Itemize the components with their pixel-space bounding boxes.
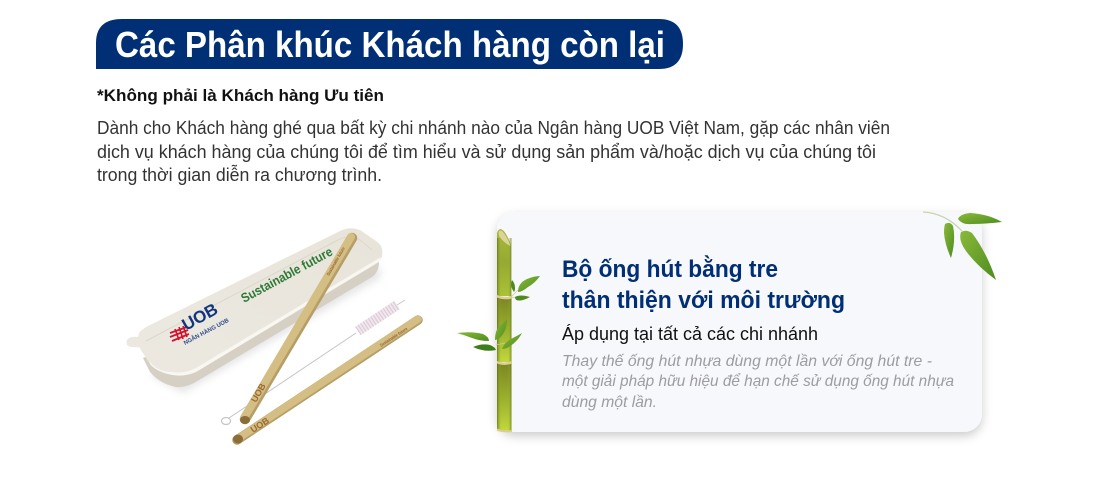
card heading: Bộ ống hút bằng tre: [562, 255, 778, 283]
panel: bamboo straw card: [497, 212, 982, 432]
straw crossing case: [240, 237, 352, 424]
card heading: [562, 255, 845, 314]
loose straw: UOB: [249, 415, 271, 435]
case lid: [126, 228, 382, 376]
title banner: Các Phân khúc Khách hàng còn lại: [115, 24, 665, 65]
logo on case: UOB: [179, 299, 221, 334]
icon: bamboo stalk with leaves: [457, 229, 540, 432]
straw crossing case: Sustainable future: [326, 246, 346, 276]
description paragraph: [97, 118, 890, 185]
case shadow: [150, 265, 380, 393]
icon: bamboo leaves at card corner: [923, 212, 1002, 280]
loose straw: [233, 319, 418, 444]
card description: Thay thế ống hút nhựa dùng một lần với ống hút tre -: [562, 353, 932, 370]
slogan on case: Sustainable future: [238, 244, 335, 306]
description paragraph: Dành cho Khách hàng ghé qua bất kỳ chi nhánh nào của Ngân hàng UOB Việt Nam, gặp các nhân viên: [97, 118, 890, 138]
loose straw: Sustainable future: [379, 326, 409, 348]
description paragraph: trong thời gian diễn ra chương trình.: [97, 164, 382, 185]
logo on case: NGÂN HÀNG UOB: [183, 317, 231, 347]
card heading: thân thiện với môi trường: [562, 287, 845, 314]
case base: [143, 250, 381, 387]
eligibility note heading: *Không phải là Khách hàng Ưu tiên: [97, 86, 384, 105]
logo on case: [170, 299, 231, 347]
availability line: Áp dụng tại tất cả các chi nhánh: [562, 324, 818, 344]
card description: [562, 353, 954, 411]
description paragraph: dịch vụ khách hàng của chúng tôi để tìm hiểu và sử dụng sản phẩm và/hoặc dịch vụ của chúng tôi: [97, 142, 876, 162]
product image: bamboo straw set: [126, 228, 418, 444]
cleaning brush: [222, 300, 405, 424]
card description: một giải pháp hữu hiệu để hạn chế sử dụng ống hút nhựa: [562, 372, 954, 390]
card description: dùng một lần.: [562, 394, 657, 411]
straw crossing case: UOB: [249, 381, 268, 404]
